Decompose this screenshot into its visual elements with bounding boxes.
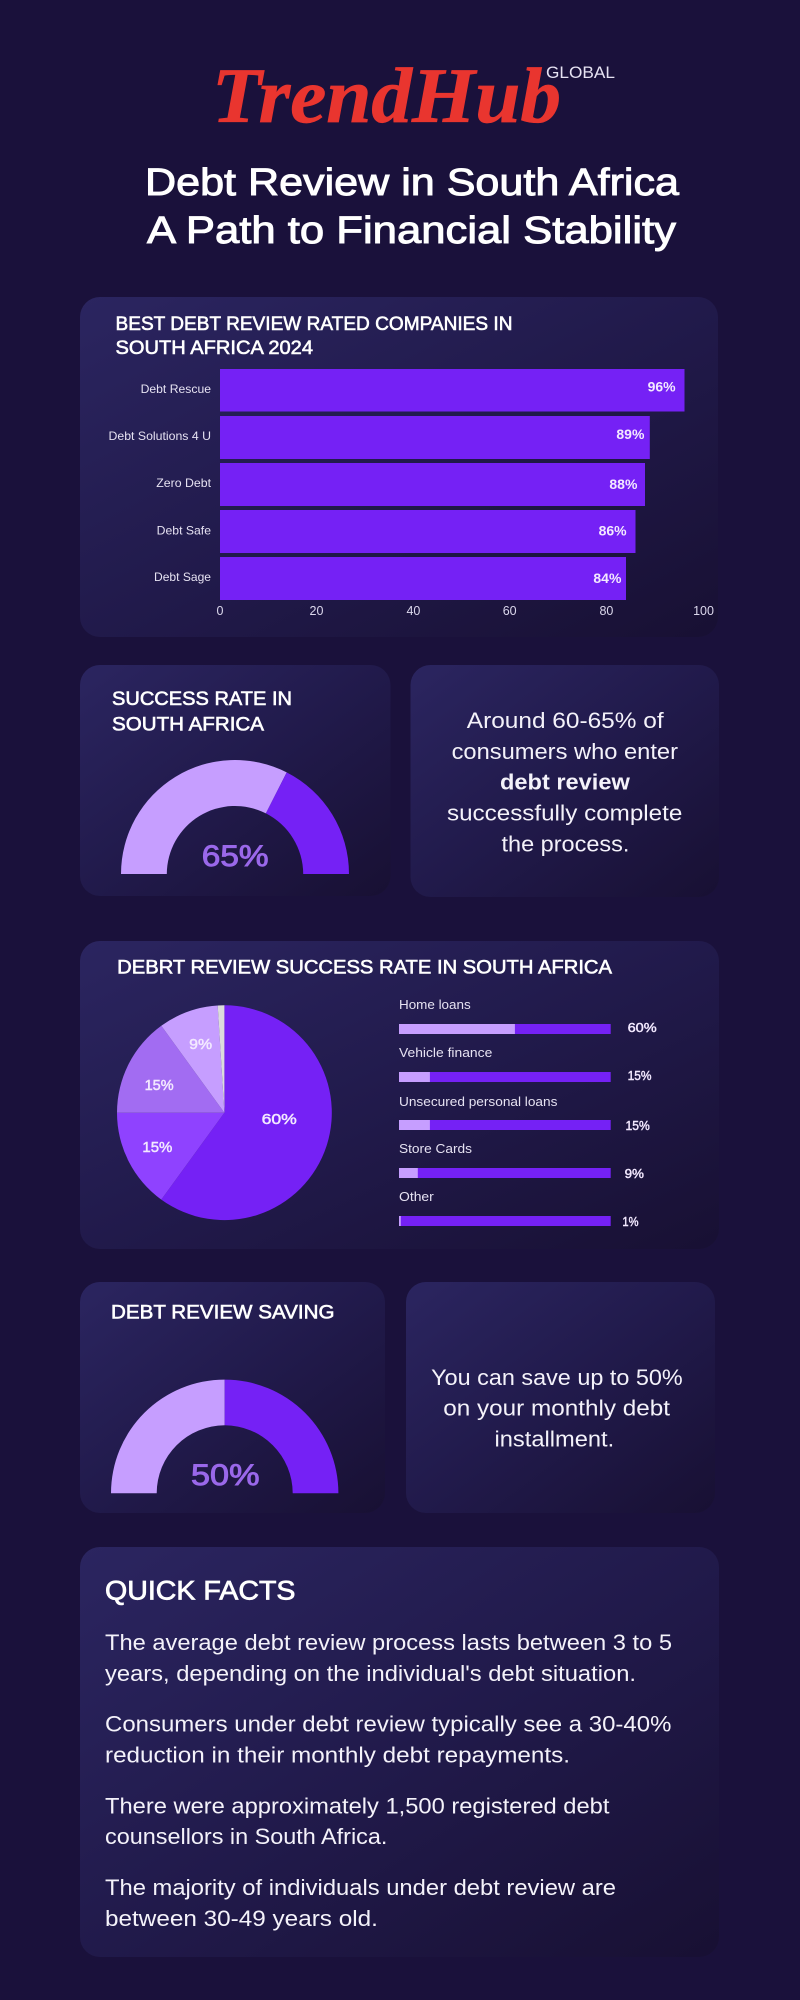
legend: progress bars: Store Cards: [399, 1141, 473, 1156]
panel heading: SUCCESS RATE IN: [112, 688, 292, 710]
fact: duration: years, depending on the individual's debt situation.: [105, 1661, 636, 1686]
logo: TrendHub Global: TrendHub: [212, 52, 561, 139]
fact: duration: The average debt review process lasts between 3 to 5: [105, 1630, 672, 1655]
fact: age: The majority of individuals under debt review are: [105, 1875, 616, 1900]
legend: progress bars: 1%: [622, 1214, 639, 1229]
bar chart: company ratings: [108, 369, 714, 618]
bar chart: company ratings: 96%: [648, 380, 676, 394]
gauge chart: 50%: 50%: [191, 1459, 260, 1492]
bar chart: company ratings: Debt Sage: [154, 570, 211, 584]
fact: counsellors: There were approximately 1,500 registered debt: [105, 1793, 610, 1818]
fact: age: [105, 1875, 616, 1931]
panel: success rate text: [410, 665, 719, 897]
fact: counsellors: counsellors in South Africa.: [105, 1824, 387, 1849]
bar chart: company ratings: 89%: [616, 427, 644, 442]
legend: progress bars: 60%: [628, 1020, 657, 1035]
panel: debt breakdown: [80, 941, 719, 1249]
panel heading: [116, 313, 512, 359]
bar chart: company ratings: 88%: [609, 477, 637, 492]
description text: installment.: [494, 1427, 614, 1452]
pie chart: 60%: [262, 1111, 297, 1128]
panel heading: SOUTH AFRICA 2024: [116, 337, 313, 359]
logo: TrendHub Global: GLOBAL: [546, 63, 615, 82]
panel heading: DEBRT REVIEW SUCCESS RATE IN SOUTH AFRICA: [117, 956, 612, 978]
fact: counsellors: [105, 1793, 610, 1849]
description text: the process.: [502, 832, 629, 857]
description text: You can save up to 50%: [431, 1365, 683, 1390]
pie chart: 15%: [145, 1077, 174, 1094]
panel heading: BEST DEBT REVIEW RATED COMPANIES IN: [116, 313, 512, 335]
panel heading: SOUTH AFRICA: [112, 714, 264, 736]
bar chart: company ratings: Zero Debt: [156, 476, 212, 490]
bar chart: company ratings: 60: [503, 604, 517, 618]
gauge chart: 65%: 65%: [202, 840, 269, 873]
bar chart: company ratings: 84%: [593, 571, 621, 586]
panel: quick facts: [80, 1547, 719, 1957]
description text: successfully complete: [447, 801, 682, 826]
fact: reduction: Consumers under debt review typically see a 30-40%: [105, 1712, 671, 1737]
bar chart: company ratings: Debt Solutions 4 U: [108, 429, 211, 443]
panel: saving text: [406, 1282, 715, 1513]
legend: progress bars: 15%: [626, 1118, 650, 1133]
description text: Around 60-65% of: [467, 708, 665, 733]
legend: progress bars: 9%: [625, 1166, 644, 1181]
description text: [431, 1365, 683, 1452]
bar chart: company ratings: Debt Rescue: [141, 382, 211, 396]
legend: progress bars: Home loans: [399, 997, 471, 1012]
legend: progress bars: 15%: [628, 1068, 652, 1083]
description text: debt review: [500, 769, 631, 794]
title: Debt Review in South Africa: [145, 162, 680, 204]
fact: reduction: reduction in their monthly debt repayments.: [105, 1743, 570, 1768]
legend: progress bars: Unsecured personal loans: [399, 1094, 558, 1109]
description text: on your monthly debt: [443, 1396, 670, 1421]
panel: best rated companies: [80, 297, 718, 637]
bar chart: company ratings: 80: [599, 604, 613, 618]
legend: progress bars: Other: [399, 1189, 435, 1204]
bar chart: company ratings: Debt Safe: [157, 524, 211, 538]
bar chart: company ratings: 20: [310, 604, 323, 618]
panel heading: QUICK FACTS: [105, 1575, 296, 1605]
bar chart: company ratings: 86%: [599, 524, 627, 538]
gauge chart: 50%: [111, 1380, 338, 1493]
pie chart: [117, 1005, 332, 1220]
bar chart: company ratings: 100: [693, 604, 714, 618]
fact: age: between 30-49 years old.: [105, 1906, 378, 1931]
fact: reduction: [105, 1712, 671, 1768]
description text: consumers who enter: [452, 739, 678, 764]
description text: [447, 708, 682, 857]
legend: progress bars: Vehicle finance: [399, 1045, 492, 1060]
title: [145, 162, 680, 252]
title: A Path to Financial Stability: [147, 210, 676, 252]
pie chart: 15%: [142, 1139, 172, 1156]
bar chart: company ratings: 40: [406, 604, 420, 618]
panel: success rate gauge: [80, 665, 390, 896]
bar chart: company ratings: 0: [217, 604, 224, 618]
fact: duration: [105, 1630, 672, 1686]
panel heading: DEBT REVIEW SAVING: [111, 1302, 334, 1324]
pie chart: 9%: [189, 1036, 212, 1053]
panel heading: [112, 688, 292, 736]
gauge chart: 65%: [121, 760, 349, 874]
panel: saving gauge: [80, 1282, 385, 1513]
legend: progress bars: [399, 997, 657, 1229]
